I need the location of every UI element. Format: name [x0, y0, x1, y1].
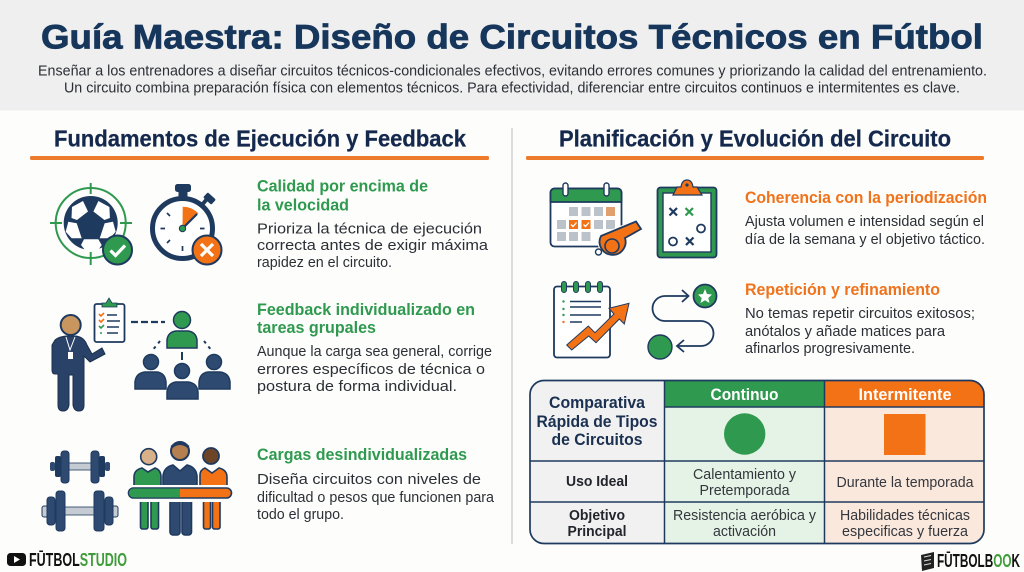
text: feedback: Aunque la carga sea general, corrige: [257, 343, 492, 360]
table heading: Rápida de Tipos: [536, 413, 658, 431]
icon: group with feedback: [131, 312, 230, 399]
text: calidad: Calidad por encima de: [257, 176, 428, 196]
column: intermitente: Intermitente: [858, 385, 952, 404]
column: intermitente: Habilidades técnicas: [840, 508, 970, 524]
icon: three athletes sharing a bar: [125, 442, 235, 535]
text: feedback: errores específicos de técnica o: [257, 361, 485, 378]
icon: notebook with rising arrow: [554, 282, 629, 358]
column: continuo: Calentamiento y: [693, 467, 797, 483]
icon: football target with check: [50, 183, 132, 265]
icon: stopwatch with cross: [152, 184, 222, 264]
text: cargas: Diseña circuitos con niveles de: [257, 471, 481, 488]
heading: planificación: Planificación y Evolución del Circuito: [559, 126, 951, 152]
comparison table: [530, 380, 984, 544]
text: cargas: dificultad o pesos que funcionen para: [257, 489, 495, 506]
text: calidad: correcta antes de exigir máxima: [257, 237, 489, 254]
panel: planificación: [526, 126, 987, 543]
text: feedback: tareas grupales: [257, 318, 376, 337]
icon: calendar with whistle: [550, 183, 641, 255]
row labels: Principal: [568, 524, 626, 540]
text: coherencia: [745, 188, 987, 248]
icon: tactics clipboard: [658, 180, 716, 258]
table heading: Comparativa: [549, 394, 646, 412]
row labels: Objetivo: [569, 508, 625, 524]
icon: coach with clipboard: [52, 298, 124, 411]
text: feedback: [257, 300, 492, 395]
table heading: [536, 394, 658, 449]
text: calidad: rapidez en el circuito.: [257, 254, 392, 271]
text: cargas: Cargas desindividualizadas: [257, 445, 467, 464]
icon: dumbbells: [42, 451, 118, 531]
subtitle: Enseñar a los entrenadores a diseñar circuitos técnicos-condicionales efectivos, evitando errores comunes y priorizando la calidad del entrenamiento.: [38, 64, 987, 80]
text: calidad: Prioriza la técnica de ejecución: [257, 220, 482, 237]
text: repetición: [745, 280, 975, 357]
title: Guía Maestra: Diseño de Circuitos Técnicos en Fútbol: [41, 19, 983, 57]
text: calidad: [257, 176, 489, 271]
text: cargas: todo el grupo.: [257, 506, 344, 523]
text: cargas: [257, 445, 495, 523]
logo: futbol studio: FŪTBOLSTUDIO: [29, 550, 127, 570]
text: feedback: Feedback individualizado en: [257, 300, 475, 319]
icon: iterative path with star: [648, 284, 716, 359]
panel: fundamentos: [30, 126, 495, 535]
text: repetición: Repetición y refinamiento: [745, 280, 940, 299]
table heading: de Circuitos: [552, 431, 642, 449]
column: intermitente: Durante la temporada: [836, 475, 974, 491]
text: repetición: No temas repetir circuitos exitosos;: [745, 305, 975, 322]
text: repetición: afinarlos progresivamente.: [745, 340, 915, 357]
column: continuo: activación: [713, 524, 776, 540]
text: coherencia: día de la semana y el objetivo táctico.: [745, 231, 985, 248]
heading: planificación: [526, 126, 984, 160]
text: feedback: postura de forma individual.: [257, 378, 457, 395]
column: intermitente: especificas y fuerza: [842, 524, 969, 540]
text: coherencia: Coherencia con la periodización: [745, 188, 987, 207]
heading: fundamentos: Fundamentos de Ejecución y Feedback: [54, 126, 467, 152]
logo: futbol studio: [7, 550, 127, 570]
row labels: Uso Ideal: [566, 474, 628, 490]
column: intermitente: [836, 385, 974, 540]
column: continuo: Resistencia aeróbica y: [673, 508, 817, 524]
text: calidad: la velocidad: [257, 196, 349, 214]
text: repetición: anótalos y añade matices para: [745, 323, 946, 340]
column: continuo: [673, 385, 817, 540]
header band: [0, 0, 1024, 110]
subtitle: Un circuito combina preparación física con elementos técnicos. Para efectividad, diferenciar entre circuitos continuos e intermitentes es clave.: [64, 80, 960, 96]
column: continuo: Continuo: [710, 385, 778, 404]
row labels: [566, 474, 628, 540]
subtitle: [38, 64, 987, 96]
column: continuo: Pretemporada: [700, 483, 790, 499]
logo: futbol book: FŪTBOLBOOK: [937, 551, 1020, 571]
text: coherencia: Ajusta volumen e intensidad según el: [745, 213, 984, 230]
